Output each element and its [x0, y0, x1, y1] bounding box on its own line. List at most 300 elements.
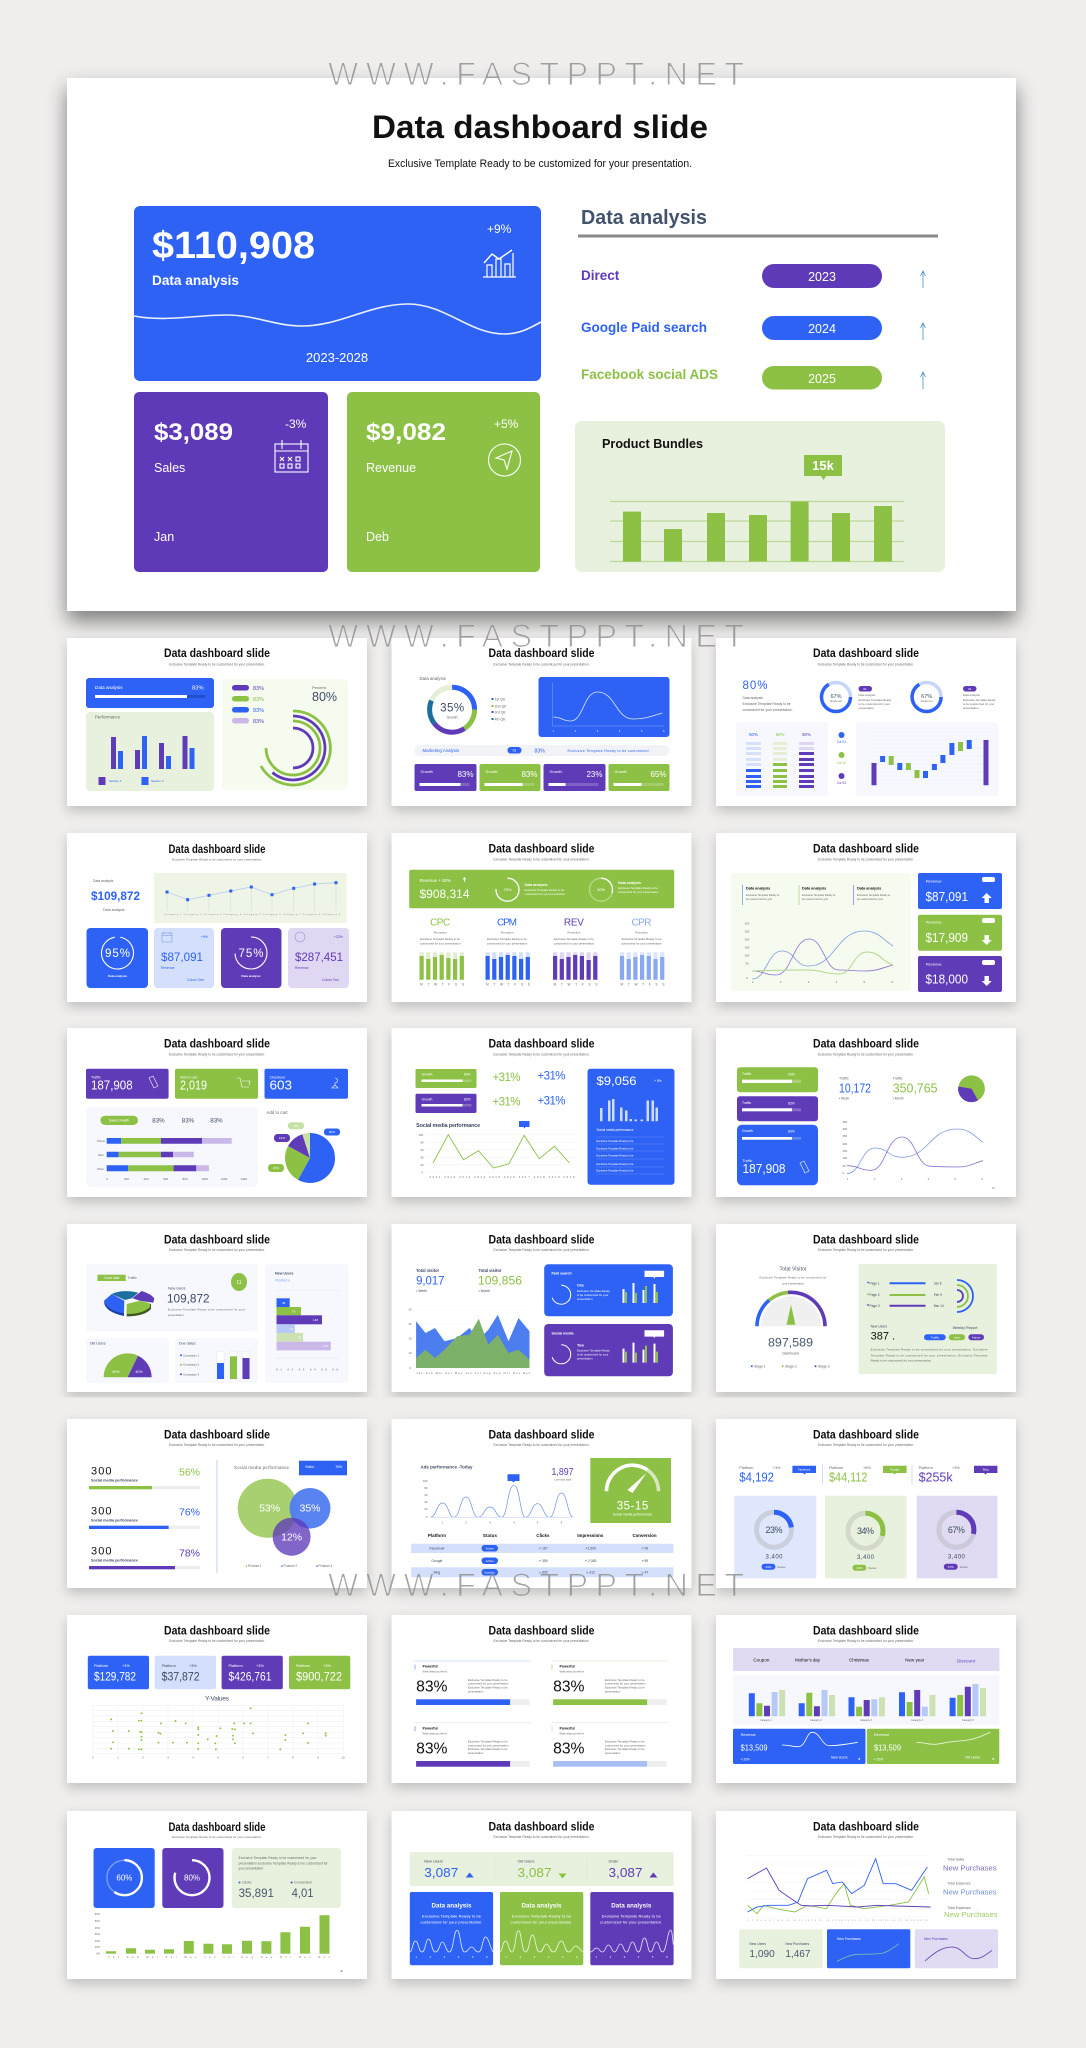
- text blocks: [742, 885, 891, 905]
- visitor box: Visitor: [305, 1465, 315, 1469]
- subtitle: Exclusive Template Ready to be customized for your presentation.: [494, 662, 590, 666]
- progress group 3: 300: [91, 1546, 112, 1558]
- title: Data dashboard slide: [813, 1626, 919, 1638]
- blue ring card: [86, 928, 148, 988]
- row: google paid search: 2024: [808, 322, 836, 336]
- blue wave card: $13,509: [741, 1743, 768, 1753]
- scatter chart: 0: [92, 1755, 94, 1759]
- category dots: [837, 732, 846, 785]
- panel: slide 19 rings and bars: [67, 1811, 367, 1979]
- bar chart: 40%: [95, 1926, 101, 1930]
- pills: 83%: [253, 686, 264, 692]
- block 3: customized for your presentation: [468, 1743, 509, 1747]
- stacked bars panel: 83%: [152, 1118, 165, 1124]
- scatter chart: 4: [192, 1755, 194, 1759]
- callout: 15k: 15k: [812, 458, 835, 473]
- curve chart: 50: [842, 1164, 846, 1168]
- panel: slide 16 scatter: [67, 1615, 367, 1783]
- stat month: Total visitor: [478, 1268, 502, 1273]
- title: Data dashboard slide: [813, 843, 919, 855]
- wave chart: 0: [426, 1515, 428, 1519]
- chart heading: Social media performance: [416, 1123, 480, 1129]
- platform stats: Platform: [829, 1466, 843, 1470]
- title: Data dashboard slide: [488, 1038, 594, 1050]
- blue side panel: Exclusive Template Ready to be: [596, 1154, 634, 1158]
- pills: 83%: [253, 708, 264, 714]
- revenue change: +5%: [494, 417, 519, 431]
- green report panel: [859, 1264, 997, 1374]
- venn legend: Product 2: [284, 1564, 297, 1568]
- row: facebook social ads: [581, 366, 926, 390]
- table rows: Google: [431, 1559, 442, 1563]
- ring 2: Exclusive Template Ready: [963, 698, 996, 702]
- card 1: Review: [778, 1566, 786, 1569]
- green stat card: New Users: [749, 1942, 766, 1946]
- watermark lower: WWW.FASTPPT.NET: [328, 1567, 744, 1603]
- new users panel: 61: [290, 1327, 294, 1331]
- gauge heading: [760, 1267, 827, 1285]
- pills: User: [954, 1335, 960, 1339]
- new users panel: 48: [282, 1301, 286, 1305]
- stat: Live and total: [554, 1478, 572, 1482]
- curve chart: 150: [842, 1149, 848, 1153]
- block 2: 83%: [553, 1679, 584, 1696]
- green report panel: Weekly Report: [953, 1326, 978, 1330]
- subtitle: Exclusive Template Ready to be customized for your presentation.: [169, 662, 265, 666]
- ring 2: Simple text: [921, 700, 933, 703]
- chart axes labels: 20: [420, 1163, 424, 1167]
- radial panel: [222, 679, 348, 790]
- pills: Traffic: [931, 1335, 940, 1339]
- bar chart panel: Category 5: [962, 1719, 975, 1722]
- gauge legend: Stage 3: [818, 1365, 830, 1369]
- panel: slide 10 3D pie and users: [67, 1224, 367, 1392]
- blue side panel: Exclusive Template Ready to be: [596, 1147, 634, 1151]
- block 1: 83%: [416, 1679, 448, 1696]
- text blocks: Data analysis: [802, 887, 826, 891]
- blue wave card: [733, 1729, 866, 1764]
- watermark top: WWW.FASTPPT.NET: [328, 56, 744, 92]
- bar chart panel: Category 3: [860, 1719, 873, 1722]
- block 2: Exclusive Template Ready to be: [605, 1678, 645, 1682]
- traffic panel: Traffic: [128, 1276, 137, 1280]
- green text panel: [232, 1848, 341, 1908]
- table header: Clicks: [536, 1533, 550, 1538]
- purple revenue card: Revenue: [926, 962, 942, 966]
- revenue label: Revenue: [366, 461, 416, 475]
- metric descriptions: Exclusive Template Ready to be: [420, 937, 460, 941]
- y axis labels: 150: [745, 946, 750, 950]
- light blue card: Revenue: [161, 966, 175, 970]
- card green: +3%: [323, 1664, 331, 1668]
- wave chart: 20: [424, 1507, 428, 1511]
- checkout card: 603: [270, 1079, 292, 1093]
- traffic card: [86, 1069, 169, 1099]
- light blue card: Colum One: [187, 978, 204, 982]
- chart legend: New Purchases: [943, 1887, 997, 1896]
- growth cards: Growth: [420, 770, 433, 774]
- weekday labels: [420, 983, 664, 987]
- block 3: [415, 1723, 531, 1767]
- stacked bars panel: Phone: [97, 1139, 106, 1143]
- stacked bars panel: 0: [106, 1177, 108, 1181]
- table rows: ↗ 2,083: [584, 1559, 597, 1563]
- panel: slide 1 donut arcs and bars: [67, 638, 367, 806]
- blue ring card: Data analysis: [108, 974, 127, 978]
- lavender card: Revenue: [295, 966, 309, 970]
- stat week: 9,017: [416, 1276, 444, 1288]
- block 2: customized for your presentation: [605, 1682, 646, 1686]
- green traffic card: [737, 1067, 818, 1092]
- venn legend: [246, 1564, 332, 1568]
- table rows: ↗ 355: [538, 1559, 548, 1563]
- green gauge card: 35-15: [617, 1501, 648, 1513]
- social media card: [544, 1324, 673, 1376]
- green text panel: your presentation: [239, 1867, 263, 1871]
- blue traffic card: 83%: [788, 1130, 795, 1134]
- page rows: [867, 1282, 944, 1308]
- bar chart: 60%: [95, 1912, 101, 1916]
- venn diagram: 12%: [281, 1532, 302, 1544]
- radial arcs: [261, 711, 330, 785]
- growth card purple: Growth: [422, 1098, 433, 1102]
- chart panel: [730, 873, 911, 991]
- ring 1: to be customized for your: [858, 702, 890, 706]
- block 3: Exclusive Template Ready to be: [468, 1740, 508, 1744]
- table rows: Active: [486, 1546, 494, 1550]
- tag: [519, 1121, 530, 1128]
- metric descriptions: Promotion: [568, 931, 581, 935]
- subtitle: Exclusive Template Ready to be customized for your presentation.: [494, 1639, 590, 1643]
- watermark middle: WWW.FASTPPT.NET: [328, 618, 744, 654]
- traffic card: Traffic: [91, 1076, 101, 1080]
- platform tags: Google: [890, 1467, 900, 1471]
- pie chart: [266, 1110, 340, 1172]
- table rows: ↘ 47: [641, 1571, 648, 1575]
- green gauge card: Social media performance: [613, 1513, 652, 1517]
- light blue card: $87,091: [161, 950, 203, 964]
- green stat card: New Purchases: [785, 1942, 809, 1946]
- blue side panel: + 5%: [654, 1079, 662, 1083]
- lavender tabs: Discount: [957, 1658, 976, 1664]
- subtitle: Exclusive Template Ready to be customized for your presentation.: [818, 857, 914, 861]
- sales label: Sales: [154, 461, 185, 475]
- pills: Admin: [972, 1335, 981, 1339]
- green banner: Exclusive Template Ready to be: [618, 886, 658, 890]
- stacked bars panel: 600: [163, 1177, 168, 1181]
- legend: 1st Qtr: [494, 698, 506, 702]
- icon: calendar: [275, 440, 308, 472]
- marketing analysis bar: 83%: [534, 748, 545, 754]
- blue wave card: Revenue: [741, 1733, 756, 1737]
- metric descriptions: customized for your presentation: [487, 942, 528, 946]
- legend: Section 2: [151, 779, 164, 783]
- panel: slide 14 ads table: [392, 1419, 692, 1588]
- chart legend: Total Expenses: [948, 1882, 971, 1886]
- green banner: [409, 870, 674, 908]
- green stat card: 1,467: [785, 1948, 811, 1960]
- stat month: 109,856: [478, 1276, 522, 1288]
- metric descriptions: Exclusive Template Ready to be: [622, 937, 662, 941]
- card 1: 23%: [765, 1565, 772, 1569]
- weekday labels: M T W T F S S: [620, 983, 664, 987]
- venn legend: Product 3: [318, 1564, 332, 1568]
- green revenue card: [918, 915, 1002, 951]
- panel: slide 8 social media line chart: [392, 1028, 692, 1197]
- row: facebook social ads: 2025: [808, 372, 836, 386]
- green wave card: Exclusive Template Ready to be: [512, 1914, 572, 1919]
- scatter chart: 1: [117, 1755, 119, 1759]
- blue side panel: Social media performance: [596, 1128, 634, 1132]
- old users panel: 40%: [135, 1370, 143, 1374]
- row: google paid search: Google Paid search: [581, 320, 707, 335]
- green banner: Data analysis: [524, 883, 547, 887]
- sales change: -3%: [285, 417, 307, 431]
- green wave card: [500, 1892, 583, 1965]
- venn diagram: 35%: [299, 1502, 321, 1514]
- new users panel: 170: [323, 1344, 328, 1348]
- metric headers: REV: [564, 918, 584, 929]
- purple ring card: Data analysis: [241, 974, 261, 978]
- ring 1: 67%: [830, 694, 842, 700]
- stat week: • Week: [416, 1289, 427, 1293]
- social media card: presentation.: [577, 1357, 593, 1361]
- chart legend: New Purchases: [943, 1863, 997, 1872]
- block 4: Powerful: [560, 1726, 575, 1730]
- green report panel: New Users: [871, 1324, 887, 1328]
- card purple: $426,761: [228, 1672, 272, 1684]
- curve chart: [842, 1120, 983, 1181]
- green banner: 30%: [597, 887, 605, 892]
- due dates panel: Campaign 2: [183, 1363, 200, 1367]
- blue wave card: Exclusive Template Ready to be: [422, 1914, 482, 1919]
- traffic panel: presentation.: [168, 1313, 184, 1317]
- ring 1: 01: [863, 687, 867, 691]
- gauge legend: Stage 1: [754, 1365, 766, 1369]
- blue traffic card: 187,908: [742, 1162, 786, 1176]
- bar chart: Jan Feb Mar Apr May Jun Jul Aug Sep Oct Nov Dec: [108, 1955, 331, 1959]
- platform stats: Platform: [919, 1466, 933, 1470]
- panel: slide 7 traffic stacked bars: [67, 1028, 367, 1197]
- stat strip: Order: [608, 1859, 619, 1863]
- area chart: [408, 1308, 531, 1375]
- percent stats: [492, 1071, 566, 1109]
- scatter chart: 8: [292, 1755, 294, 1759]
- gauge heading: Total Visitor: [780, 1267, 807, 1273]
- panel: slide 11 area chart: [392, 1224, 692, 1392]
- scatter chart: 9: [317, 1755, 319, 1759]
- card 3: 3,400: [948, 1554, 966, 1560]
- new users panel: 79: [292, 1310, 296, 1314]
- panel: slide 9 traffic cards and curves: [716, 1028, 1016, 1197]
- purple ring card: 80%: [184, 1874, 200, 1882]
- subtitle: Exclusive Template Ready to be customized for your presentation.: [494, 1052, 590, 1056]
- progress group 3: Social media performance: [91, 1559, 138, 1563]
- scatter chart: 10: [341, 1755, 345, 1759]
- chart legend: Total Expenses: [948, 1906, 971, 1910]
- marketing analysis bar: Exclusive Template Ready to be customized: [568, 749, 648, 753]
- card 3: 67%: [948, 1565, 954, 1569]
- table rows: ↗ 99: [641, 1547, 648, 1551]
- ring 2: 67%: [921, 694, 932, 700]
- page rows: Page 3: [870, 1304, 880, 1308]
- table rows: Bing: [434, 1571, 440, 1575]
- blue line chart card: 1 2 3 4 5 6: [552, 729, 665, 733]
- y axis labels: 50: [745, 962, 749, 966]
- page rows: Feb 9: [934, 1293, 942, 1297]
- line chart panel: [154, 873, 346, 923]
- scatter chart: 3: [167, 1755, 169, 1759]
- growth cards: 83%: [457, 770, 474, 779]
- ring 2: [912, 682, 996, 712]
- block 1: Write what you feel in: [422, 1670, 448, 1674]
- green report panel: 387 .: [871, 1331, 895, 1343]
- chart axes labels: 0: [422, 1170, 424, 1174]
- stat week: • Week: [839, 1097, 849, 1101]
- blue revenue card: $87,091: [926, 890, 968, 904]
- grouped bars: [111, 736, 194, 769]
- purple revenue card: [918, 956, 1002, 992]
- blue progress card: 83%: [192, 686, 204, 692]
- growth cards: 23%: [586, 770, 602, 779]
- page number: 11: [992, 1186, 995, 1190]
- block 4: 83%: [553, 1740, 584, 1757]
- scatter title: Y-Values: [205, 1696, 230, 1703]
- blue ring card: [94, 1848, 155, 1908]
- curve chart: 200: [842, 1142, 848, 1146]
- bar chart panel: Category 1: [760, 1719, 773, 1722]
- table header: Conversion: [632, 1533, 657, 1538]
- panel: slide 17 four progress blocks: [392, 1615, 692, 1783]
- card purple: Platform: [228, 1664, 243, 1668]
- purple traffic card: Traffic: [742, 1101, 752, 1105]
- line chart: [433, 1135, 570, 1168]
- scatter chart: [92, 1705, 345, 1759]
- 3D pie chart: [104, 1291, 154, 1316]
- y axis labels: 100: [745, 954, 750, 958]
- purple sales card: [134, 392, 328, 572]
- card light blue: $37,872: [162, 1672, 200, 1684]
- title: Data dashboard slide: [164, 1038, 270, 1050]
- block 3: presentation: [468, 1751, 484, 1755]
- scatter chart: 5: [217, 1755, 219, 1759]
- segmented columns panel: 80%: [802, 732, 811, 737]
- table header: [428, 1533, 657, 1538]
- wave chart: 5: [537, 1521, 539, 1525]
- panel: slide 13 venn: [67, 1419, 367, 1588]
- card 1: [734, 1496, 816, 1578]
- green text panel: presentation Exclusive Template Ready to be customized for: [239, 1861, 329, 1865]
- due dates panel: [175, 1338, 258, 1383]
- progress group 2: [89, 1505, 200, 1529]
- old users panel: [86, 1338, 169, 1383]
- marketing analysis bar: 01: [513, 749, 516, 753]
- purple revenue card: $18,000: [926, 973, 968, 987]
- row: direct: Direct: [581, 268, 620, 283]
- green report panel: Ready to be customized for your presentation.: [871, 1359, 932, 1363]
- area chart: 30: [408, 1322, 412, 1326]
- stat week: [416, 1268, 444, 1293]
- category dots: Ca 02: [837, 761, 846, 765]
- category dots: Ca 03: [837, 781, 846, 785]
- traffic panel: [86, 1264, 258, 1331]
- main subtitle: Exclusive Template Ready to be customized for your presentation.: [388, 158, 692, 170]
- performance panel: Performance: [95, 714, 121, 720]
- gauge value: 897,589: [768, 1337, 813, 1349]
- stat month: Traffic: [893, 1077, 903, 1081]
- area chart: Jan Feb Mar Apr May Jun Jul Aug Sep Oct Nov Dec: [416, 1371, 531, 1375]
- green revenue card: [347, 392, 540, 572]
- radial arcs: [957, 1280, 973, 1312]
- metric descriptions: Promotion: [501, 931, 514, 935]
- traffic panel: 11: [236, 1280, 242, 1286]
- pills: [232, 685, 264, 725]
- green stat card: 1,090: [749, 1948, 775, 1960]
- progress group 1: 300: [91, 1466, 112, 1478]
- y axis labels: [745, 922, 750, 980]
- blue side panel: Exclusive Template Ready to be: [596, 1162, 634, 1166]
- title: Data dashboard slide: [488, 1626, 594, 1638]
- paid search card: presentation.: [577, 1297, 593, 1301]
- waterfall chart panel: [856, 722, 998, 796]
- blue line card: New Purchases: [837, 1937, 861, 1941]
- paid search card: to be customized for your: [577, 1293, 608, 1297]
- panel: slide 2 growth donut: 35%: [440, 702, 464, 714]
- bar chart: [623, 502, 892, 562]
- title: Data dashboard slide: [813, 1822, 919, 1834]
- title: Data dashboard slide: [813, 648, 919, 660]
- card green: Platform: [296, 1664, 310, 1668]
- blue wave card: New Users: [831, 1756, 848, 1760]
- table rows: ↘ 312: [586, 1571, 595, 1575]
- title: Data dashboard slide: [488, 648, 594, 660]
- panel: product bundles: [575, 421, 945, 572]
- growth card green: 83%: [464, 1072, 470, 1076]
- blue traffic card: Growth: [742, 1129, 753, 1133]
- metric headers: CPC: [430, 918, 450, 929]
- weekday labels: M T W T F S S: [486, 983, 530, 987]
- green gauge card: [590, 1458, 671, 1523]
- stat strip: 3,087: [608, 1866, 643, 1880]
- subtitle: Exclusive Template Ready to be customized for your presentation.: [494, 1835, 590, 1839]
- green report panel: Exclusive Template Ready to be customized for your presentation. Exclusive: [871, 1348, 988, 1352]
- block 1: [415, 1661, 531, 1705]
- stacked bars panel: [86, 1107, 258, 1187]
- y axis labels: 200: [745, 938, 750, 942]
- bar chart panel: Category 2: [810, 1719, 823, 1722]
- ring 2: presentation.: [963, 706, 979, 710]
- wave chart: 100: [423, 1479, 428, 1483]
- subtitle: Exclusive Template Ready to be customized for your presentation.: [494, 857, 590, 861]
- purple wave card: 1 2 3 4 5 6: [596, 1955, 668, 1959]
- metric descriptions: customized for your presentation: [420, 942, 461, 946]
- page rows: Mar 14: [934, 1304, 944, 1308]
- stat month: [478, 1268, 522, 1293]
- progress group 1: [89, 1466, 200, 1489]
- subtitle: Exclusive Template Ready to be customized for your presentation.: [172, 857, 262, 861]
- new users panel: Platform: [275, 1278, 291, 1283]
- venn diagram: [238, 1479, 330, 1556]
- wave chart: 1: [442, 1521, 444, 1525]
- text blocks: Data analysis: [746, 887, 770, 891]
- percent stats: +31%: [492, 1072, 520, 1084]
- stacked bars panel: Other: [97, 1167, 104, 1171]
- block 4: Write what you feel in: [560, 1731, 585, 1735]
- pie: [958, 1075, 985, 1102]
- pie chart: 25%: [273, 1166, 279, 1170]
- card light blue: +3%: [189, 1664, 197, 1668]
- stacked bars panel: Web: [98, 1153, 104, 1157]
